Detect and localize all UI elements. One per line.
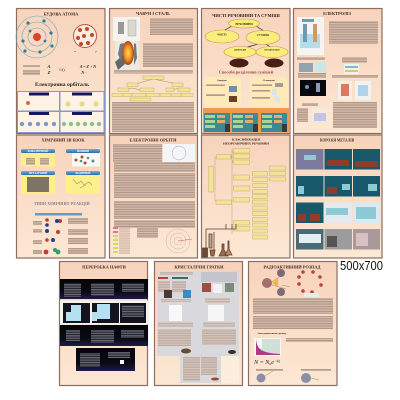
icon: nucleus: n xyxy=(74,51,76,53)
panel: metallic: МЕТАЛІЧНИЙ xyxy=(29,172,47,175)
caption xyxy=(114,70,193,74)
title: oil refining: ПЕРЕРОБКА НАФТИ xyxy=(82,264,127,270)
text: iron production xyxy=(150,18,193,35)
diagram: substances: НЕОДНОРІДНІ xyxy=(264,50,280,52)
panel: bottom table xyxy=(203,108,289,132)
image: blast furnace xyxy=(113,17,140,72)
text: orbit paragraphs xyxy=(114,162,195,228)
text: application of electrolysis xyxy=(333,102,377,128)
icon: nucleus xyxy=(74,24,97,53)
diagram: substances: ЧИСТІ xyxy=(217,34,227,36)
images: electrolysis of solutions xyxy=(338,81,371,100)
title: cast iron: ЧАВУН І СТАЛЬ xyxy=(136,11,170,16)
formulas: A xyxy=(46,64,51,69)
title: classification: КЛАСИФІКАЦІЯ xyxy=(232,138,260,142)
poster: oil refining xyxy=(60,262,148,386)
text: decay paragraphs xyxy=(253,298,333,329)
panel: ionic: ЙОННИЙ xyxy=(77,150,89,153)
panel: fractional distillation xyxy=(60,300,148,324)
heading: reaction types: ТИПИ ХІМІЧНИХ РЕАКЦІЙ xyxy=(34,201,90,206)
section: electrolysis of molten salts xyxy=(332,57,378,78)
poster: pure substances and mixtures xyxy=(202,8,290,134)
title: atom structure: БУДОВА АТОМА xyxy=(44,12,79,16)
formula: decay law: N = N₀e⁻ᵏᵗ xyxy=(253,360,281,366)
text: intro xyxy=(160,272,193,275)
list: orbital types xyxy=(113,227,130,254)
image: dark electrolysis scene xyxy=(300,80,326,96)
title: crystal lattices: КРИСТАЛІЧНІ ГРАТКИ xyxy=(175,264,224,270)
grid: corrosion slides xyxy=(296,149,380,250)
image: electrolyser xyxy=(297,17,324,55)
section: electrode processes xyxy=(297,57,326,78)
text: orbit intro xyxy=(113,144,162,162)
poster: classification of inorganic substances xyxy=(202,135,290,258)
panel: dark slides middle xyxy=(60,325,148,346)
subtitle: inorganic substances: НЕОРГАНІЧНИХ РЕЧОВИН xyxy=(223,142,269,146)
heading: electron orbital: Електронна орбіталь xyxy=(35,81,89,88)
diagram: substances: РЕЧОВИНИ xyxy=(235,22,253,26)
panel: covalent: КОВАЛЕНТНИЙ xyxy=(28,150,48,153)
title: electrolysis: ЕЛЕКТРОЛІЗ xyxy=(323,11,352,16)
image: orbit diagram xyxy=(163,144,195,162)
poster: corrosion of metals xyxy=(294,135,382,258)
panel: dark slide bottom xyxy=(76,348,135,371)
panel: homogeneous methods: Однорідні xyxy=(217,79,227,82)
icon: nucleus: p xyxy=(95,51,97,53)
title: radioactive decay: РАДІОАКТИВНИЙ РОЗПАД xyxy=(264,264,321,270)
poster: atom structure xyxy=(16,8,105,134)
formulas: N - xyxy=(80,70,87,75)
section: alpha decay xyxy=(256,369,283,382)
heading: decay law: Закон радіоактивного розпаду xyxy=(258,332,287,335)
panel: heterogeneous methods: Неоднорідні xyxy=(263,79,275,82)
poster: cast iron and steel xyxy=(110,8,198,134)
text: orbit note xyxy=(137,228,158,238)
poster: crystal lattices xyxy=(154,262,242,386)
diagram: substances: ОДНОРІДНІ xyxy=(234,50,246,52)
poster: electrolysis xyxy=(294,8,382,134)
chart: decay curve xyxy=(254,338,281,356)
panel: hydrogen: ВОДНЕВИЙ xyxy=(76,172,90,175)
formulas: ¹⁶O xyxy=(59,68,65,72)
title: electron orbits: ЕЛЕКТРОННІ ОРБІТИ xyxy=(130,138,177,142)
text: steel production xyxy=(143,43,193,67)
formulas: A = Z + N xyxy=(79,64,97,69)
section: beta decay xyxy=(301,369,331,383)
formulas xyxy=(23,64,97,75)
diagram: classification tree xyxy=(208,148,286,239)
icon: nuclear fission xyxy=(262,269,290,296)
section: water electrolysis xyxy=(297,103,328,125)
panel: lattice types xyxy=(157,271,239,383)
poster: radioactive decay xyxy=(248,262,337,386)
heading: separation methods: Способи розділення сумішей xyxy=(219,70,274,74)
formulas: Z xyxy=(47,70,51,75)
icon: orbit circles xyxy=(166,229,192,253)
text: decay note xyxy=(286,338,333,342)
table: reaction types xyxy=(33,213,88,254)
chart: classification tree xyxy=(112,76,193,101)
icon: atom model xyxy=(16,16,58,58)
poster: chemical bond xyxy=(16,135,105,258)
title: pure substances: ЧИСТІ РЕЧОВИНИ ТА СУМІШІ xyxy=(212,13,280,18)
panel: orbitals xyxy=(17,91,105,133)
icon: decay ring xyxy=(297,270,323,297)
panel: dark slides top xyxy=(60,279,148,299)
diagram: substances: СУМІШІ xyxy=(257,34,269,37)
text: properties xyxy=(112,102,194,132)
text: electrolysis definition xyxy=(329,21,378,44)
size label: 500x700 xyxy=(340,259,383,273)
poster: electron orbits xyxy=(110,135,198,258)
title: chemical bond: ХІМІЧНИЙ ЗВ'ЯЗОК xyxy=(42,138,85,142)
diagram: substances xyxy=(205,19,288,68)
icon: lab glassware xyxy=(202,224,236,257)
title: corrosion: КОРОЗІЯ МЕТАЛІВ xyxy=(320,138,355,142)
